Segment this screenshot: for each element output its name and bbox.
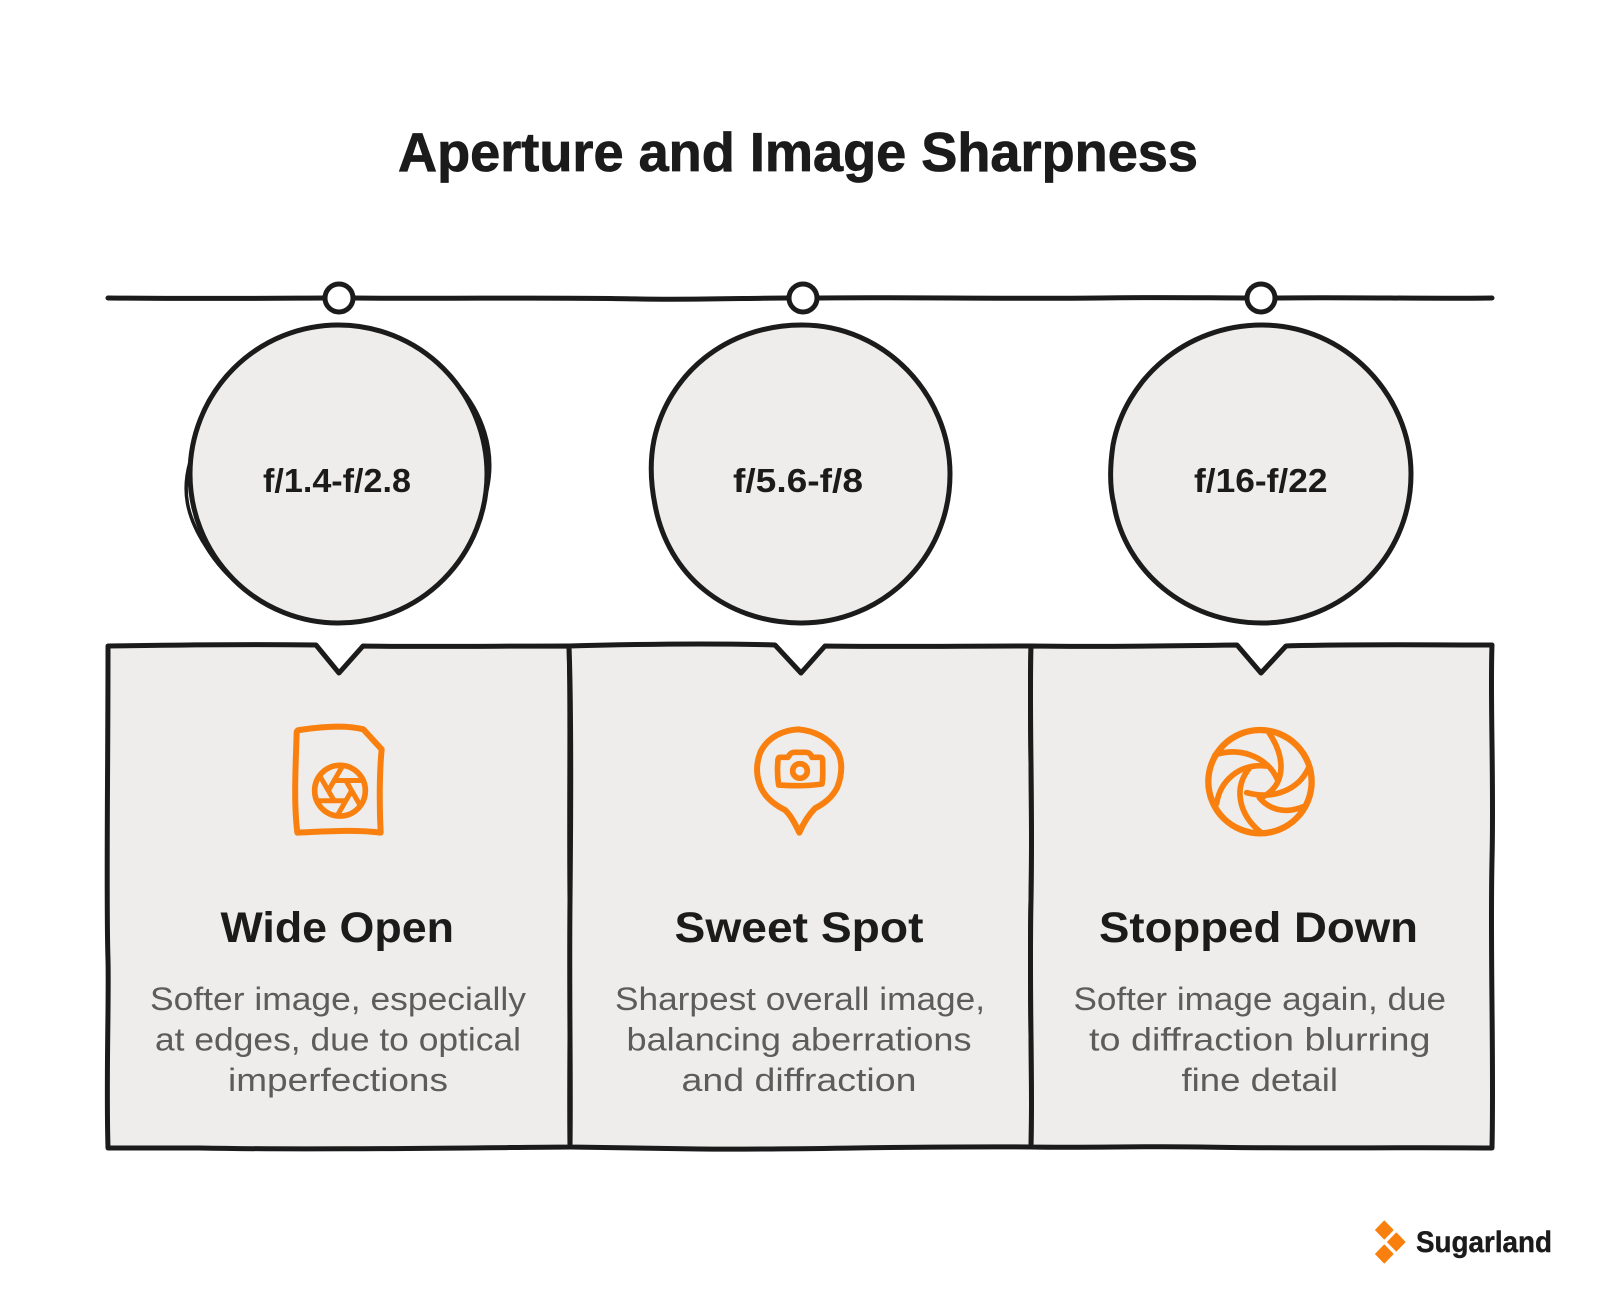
circle: f/5.6-f/8: f/5.6-f/8: [733, 462, 863, 499]
circle: f/16-f/22: [1110, 325, 1411, 623]
logo: Sugarland: [1376, 1221, 1552, 1263]
description: [150, 981, 526, 1098]
icon: location pin with camera: [757, 729, 841, 833]
node 1: [325, 284, 353, 312]
panel: Wide Open: [107, 645, 570, 1149]
heading: Stopped Down: [1099, 904, 1418, 952]
description: imperfections: [228, 1062, 448, 1098]
panel: Sweet Spot: [569, 644, 1032, 1149]
title: Aperture and Image Sharpness: [398, 121, 1198, 183]
circle: f/5.6-f/8: [651, 325, 950, 623]
description: fine detail: [1182, 1062, 1338, 1098]
description: to diffraction blurring: [1089, 1022, 1430, 1058]
icon: orange diamonds: [1376, 1221, 1405, 1263]
node 2: [789, 284, 817, 312]
description: and diffraction: [682, 1062, 916, 1098]
description: Softer image, especially: [150, 981, 526, 1017]
circle: f/16-f/22: f/16-f/22: [1194, 462, 1328, 499]
description: [1074, 981, 1446, 1098]
node 3: [1247, 284, 1275, 312]
description: [615, 981, 985, 1098]
description: at edges, due to optical: [155, 1022, 521, 1058]
icon: document with aperture: [295, 726, 382, 833]
wordmark: Sugarland: [1416, 1226, 1552, 1259]
description: balancing aberrations: [626, 1022, 972, 1058]
circle: f/1.4-f/2.8: [186, 325, 490, 623]
heading: Sweet Spot: [674, 904, 924, 952]
heading: Wide Open: [220, 904, 454, 952]
circle: f/1.4-f/2.8: f/1.4-f/2.8: [263, 462, 411, 499]
panel: Stopped Down: [1030, 645, 1493, 1148]
description: Softer image again, due: [1074, 981, 1446, 1017]
icon: aperture blades: [1208, 730, 1312, 833]
description: Sharpest overall image,: [615, 981, 985, 1017]
timeline with three nodes: [108, 284, 1492, 312]
